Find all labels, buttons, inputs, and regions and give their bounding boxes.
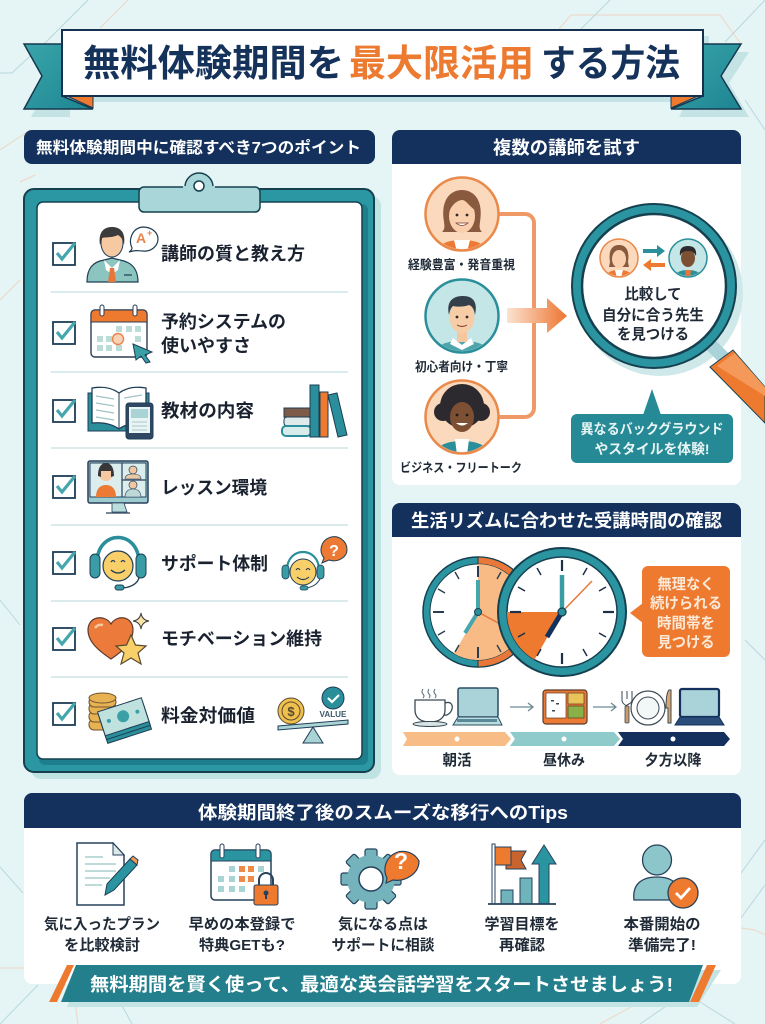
- panel: try multiple teachers: 複数の講師を試す: [493, 138, 640, 158]
- tip 2: early registration: 特典GETも?: [199, 936, 285, 954]
- icon: calendar and cursor: [91, 305, 152, 363]
- arrows: exchange: [643, 245, 665, 271]
- row: teacher quality: 講師の質と教え方: [161, 243, 305, 264]
- icon: headset face: [90, 538, 146, 590]
- callout: sustainable time slot: [630, 566, 730, 657]
- magnifier text: を見つける: [617, 326, 689, 343]
- row: support: サポート体制: [161, 553, 268, 574]
- icon: teal laptop: [453, 688, 502, 725]
- label: lunch break: 昼休み: [543, 752, 585, 769]
- icon: magnifier: [572, 204, 765, 423]
- icon: navy laptop: [675, 689, 724, 725]
- tip 5: ready to start: [624, 845, 700, 954]
- avatar: friendly man: [426, 280, 498, 354]
- icon: value scale: $: [287, 704, 295, 719]
- footer banner: [49, 965, 721, 1007]
- icon: person with check: [634, 845, 698, 908]
- arrow: morning to noon: [510, 703, 533, 711]
- row: booking system: 予約システムの: [161, 312, 286, 332]
- icon: calendar and lock: [211, 844, 278, 905]
- row: lesson environment: レッスン環境: [161, 478, 267, 498]
- icon: flag, bars and arrow: [488, 844, 556, 904]
- row: materials: [53, 385, 347, 439]
- panel: lesson time check: [392, 503, 741, 775]
- heading: 7 points: 無料体験期間中に確認すべき7つのポイント: [36, 138, 361, 157]
- icon: operator with question: [282, 537, 347, 590]
- clipboard clip: [139, 173, 260, 212]
- footer banner: 無料期間を賢く使って、最適な英会話学習をスタートさせましょう!: [90, 974, 673, 995]
- tip 2: early registration: [188, 844, 296, 954]
- icon: video call monitor: [88, 461, 148, 513]
- label: evening: 夕方以降: [644, 751, 702, 769]
- title banner: する方法: [541, 43, 680, 84]
- magnifier text: 自分に合う先生: [602, 306, 704, 324]
- icon: coffee cup: [413, 689, 452, 726]
- panel: try multiple teachers: [392, 130, 765, 485]
- timeline chevrons: [403, 732, 730, 746]
- row: lesson environment: [53, 461, 267, 513]
- callout: different backgrounds: やスタイルを体験!: [594, 441, 710, 457]
- row: materials: 教材の内容: [161, 401, 254, 421]
- connector lines: [498, 214, 534, 417]
- avatar: experienced woman: [426, 178, 498, 252]
- panel: lesson time check: 生活リズムに合わせた受講時間の確認: [411, 510, 722, 531]
- tip 3: ask support: サポートに相談: [332, 936, 434, 954]
- row: booking system: 使いやすさ: [161, 336, 251, 356]
- label: business: ビジネス・フリートーク: [400, 460, 522, 475]
- row: value for money: 料金対価値: [161, 706, 255, 726]
- callout: sustainable time slot: 無理なく: [658, 576, 714, 593]
- icon: teacher: [87, 227, 158, 282]
- callout: different backgrounds: [571, 389, 733, 463]
- row: value for money: [53, 687, 348, 743]
- icon: small man avatar: [669, 239, 707, 278]
- title banner: 無料体験期間を: [83, 43, 344, 84]
- icon: document and pencil: [77, 843, 138, 905]
- magnifier text: 比較して: [624, 285, 682, 303]
- icon: open book and tablet: [88, 387, 153, 439]
- tip 4: review goals: 学習目標を: [484, 915, 560, 933]
- icon: heart and star: [88, 613, 149, 664]
- callout: sustainable time slot: 続けられる: [650, 595, 722, 612]
- arrow: noon to evening: [593, 703, 616, 711]
- tip 4: review goals: [484, 844, 560, 954]
- icon: operator with question: ?: [329, 543, 339, 560]
- row: motivation: モチベーション維持: [161, 629, 322, 649]
- chart: right clock: [498, 548, 626, 676]
- title banner: [24, 30, 749, 117]
- row: teacher quality: [53, 227, 305, 282]
- tip 4: review goals: 再確認: [499, 936, 545, 954]
- arrow: toward magnifier: [507, 298, 567, 333]
- tip 3: ask support: [332, 848, 434, 954]
- panel: clipboard checklist: [24, 173, 381, 779]
- icon: bento box: [543, 690, 587, 724]
- tip 2: early registration: 早めの本登録で: [188, 915, 296, 933]
- icon: value scale: VALUE: [320, 709, 347, 719]
- icon: value scale: [278, 687, 348, 743]
- label: experienced: 経験豊富・発音重視: [408, 257, 515, 272]
- icon: plate and cutlery: [622, 690, 671, 725]
- title banner: 最大限活用: [349, 43, 534, 84]
- tip 3: ask support: 気になる点は: [338, 915, 428, 933]
- row: booking system: [53, 305, 286, 363]
- heading: 7 points: [24, 130, 375, 164]
- magnifier text: [602, 285, 704, 343]
- callout: sustainable time slot: 見つける: [658, 634, 714, 651]
- icon: teacher: A: [136, 230, 146, 246]
- icon: stack of books: [282, 385, 347, 437]
- callout: different backgrounds: 異なるバックグラウンド: [580, 421, 724, 437]
- tip 5: ready to start: 本番開始の: [624, 916, 700, 933]
- tip 1: compare plans: [44, 843, 160, 954]
- icon: gear and question: ?: [394, 848, 408, 874]
- row: motivation: [53, 613, 322, 664]
- icon: small woman avatar: [600, 239, 638, 278]
- row: support: [53, 537, 347, 590]
- tip 5: ready to start: 準備完了!: [628, 936, 696, 954]
- tip 1: compare plans: 気に入ったプラン: [44, 915, 160, 933]
- tip 1: compare plans: を比較検討: [64, 936, 140, 954]
- panel: tips after trial: [24, 793, 741, 984]
- icon: coins and banknotes: [89, 693, 152, 743]
- callout: sustainable time slot: 時間帯を: [657, 615, 715, 632]
- icon: teacher: +: [147, 228, 152, 238]
- avatar: business woman: [426, 380, 498, 455]
- label: for beginners: 初心者向け・丁寧: [415, 359, 508, 374]
- panel: tips after trial: 体験期間終了後のスムーズな移行へのTips: [198, 802, 568, 823]
- label: morning: 朝活: [442, 751, 472, 769]
- chart: left clock: [423, 557, 533, 667]
